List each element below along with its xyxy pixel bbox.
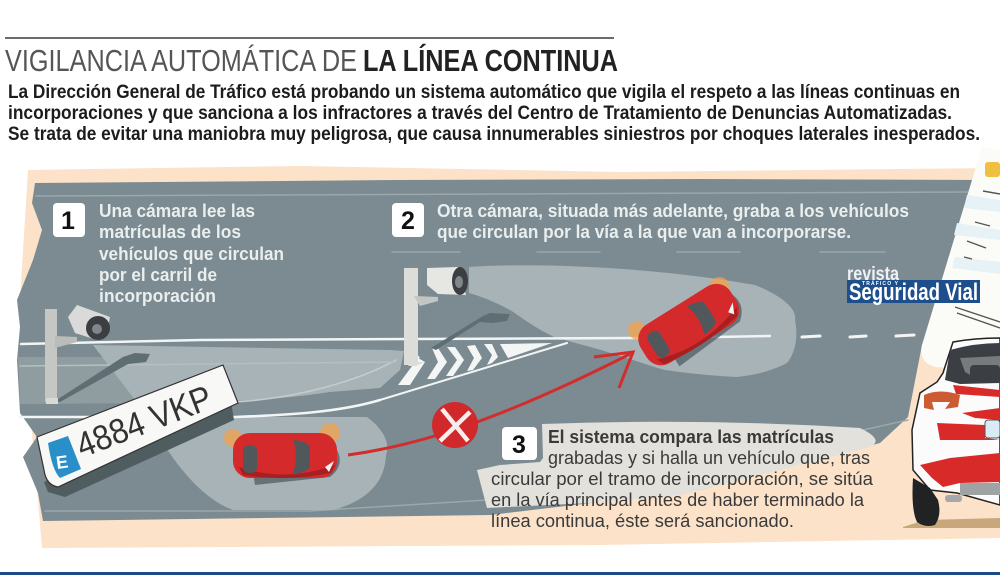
car 2 bbox=[625, 268, 752, 380]
red arrow bbox=[348, 352, 633, 455]
road lines bbox=[20, 335, 914, 417]
step 3: 3 bbox=[512, 431, 526, 459]
step 3: El sistema compara las matrículas bbox=[548, 427, 834, 447]
step 1: incorporación bbox=[99, 286, 216, 306]
peach ground bbox=[20, 166, 1000, 548]
logo: TRÁFICO Y bbox=[862, 280, 899, 287]
step 3: grabadas y si halla un vehículo que, tras bbox=[548, 448, 870, 468]
car rear view bbox=[903, 338, 1000, 528]
header rule bbox=[5, 37, 614, 39]
camera 2 beam bbox=[469, 265, 796, 377]
paper fine bbox=[921, 147, 1000, 372]
step 1: vehículos que circulan bbox=[99, 244, 284, 264]
bottom bar bbox=[0, 572, 1000, 575]
number plate bbox=[37, 365, 238, 497]
camera 2 bbox=[404, 267, 510, 366]
step 1 bbox=[53, 201, 284, 306]
chevron zone bbox=[398, 343, 552, 385]
step 1: 1 bbox=[61, 207, 75, 235]
camera 1 beam bbox=[93, 345, 404, 510]
title: LA LÍNEA CONTINUA bbox=[363, 43, 618, 78]
step 1: por el carril de bbox=[99, 265, 217, 285]
step 3: circular por el tramo de incorporación, se sitúa bbox=[491, 469, 874, 489]
intro text bbox=[8, 82, 980, 145]
car 1 bbox=[224, 423, 340, 485]
step 2: Otra cámara, situada más adelante, graba a los vehículos bbox=[437, 201, 909, 221]
step 3: en la vía principal antes de haber terminado la bbox=[491, 490, 865, 510]
title: VIGILANCIA AUTOMÁTICA DE bbox=[5, 43, 357, 78]
number plate: 4884 VKP bbox=[71, 378, 217, 465]
logo bbox=[847, 264, 980, 306]
step 3 bbox=[477, 422, 876, 531]
road bbox=[17, 179, 980, 521]
camera 1 bbox=[45, 305, 150, 404]
logo: revista bbox=[847, 264, 899, 285]
icon: prohibited X bbox=[432, 402, 478, 448]
step 1: matrículas de los bbox=[99, 222, 241, 242]
step 2 bbox=[392, 201, 909, 242]
lane markings bbox=[36, 192, 968, 511]
step 3: línea continua, éste será sancionado. bbox=[491, 511, 794, 531]
light lane strip bbox=[18, 357, 160, 404]
number plate: E bbox=[55, 451, 69, 473]
step 2: 2 bbox=[401, 207, 415, 235]
step 2: que circulan por la vía a la que van a incorporarse. bbox=[437, 222, 851, 242]
step 1: Una cámara lee las bbox=[99, 201, 255, 221]
